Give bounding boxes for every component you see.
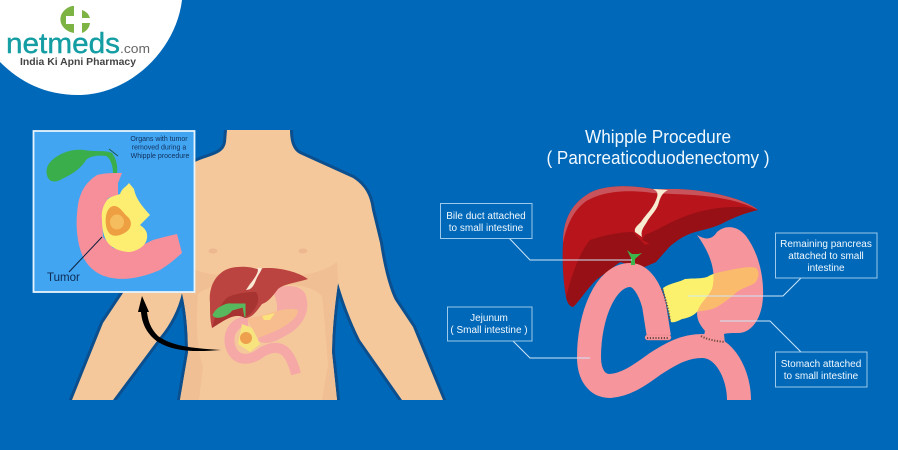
tumor pointer bbox=[69, 237, 102, 272]
small liver fissure bbox=[246, 268, 262, 290]
logo: netmeds: India Ki Apni Pharmacy bbox=[20, 56, 136, 68]
diagram: reconstructed organs bbox=[563, 186, 763, 400]
small tumor area bbox=[238, 324, 260, 352]
callout: remaining pancreas bbox=[776, 233, 877, 278]
cuff of open loop bbox=[645, 335, 671, 340]
callout: jejunum bbox=[448, 307, 532, 341]
callout lines bbox=[509, 238, 801, 358]
gallbladder removed bbox=[47, 150, 117, 182]
callout: remaining pancreas: intestine bbox=[807, 263, 845, 274]
abdomen shading bbox=[180, 262, 338, 400]
callout: stomach: Stomach attached bbox=[781, 359, 861, 370]
liver bbox=[563, 186, 758, 307]
bile duct bbox=[627, 250, 642, 265]
nipples bbox=[208, 248, 308, 254]
title: ( Pancreaticoduodenectomy ) bbox=[546, 148, 770, 168]
small liver bbox=[210, 267, 308, 328]
callout: stomach: to small intestine bbox=[784, 371, 859, 382]
small pancreas bbox=[246, 309, 298, 338]
callout: remaining pancreas: attached to small bbox=[788, 251, 864, 262]
pancreas overlap on stomach bbox=[698, 267, 758, 312]
callout: bile duct bbox=[440, 204, 532, 238]
small liver shade bbox=[212, 292, 258, 328]
sutures bbox=[647, 289, 725, 342]
callout: jejunum: Jejunum bbox=[470, 313, 508, 324]
callout: bile duct: Bile duct attached bbox=[446, 211, 526, 222]
title bbox=[546, 127, 770, 168]
title: Whipple Procedure bbox=[585, 127, 731, 147]
logo: netmeds bbox=[0, 0, 182, 95]
tumor bbox=[106, 206, 131, 236]
callout: stomach bbox=[776, 352, 867, 387]
small stomach bbox=[258, 286, 307, 343]
logo wordmark: netmeds bbox=[6, 28, 120, 60]
yellow pancreas section bbox=[102, 183, 150, 252]
callout: remaining pancreas: Remaining pancreas bbox=[780, 239, 872, 250]
inset label: Whipple procedure bbox=[131, 153, 189, 160]
logo: netmeds: .com bbox=[120, 41, 150, 56]
inset label: removed during a bbox=[132, 144, 186, 152]
icon: green cross bbox=[60, 6, 90, 33]
liver shaded lobe bbox=[566, 232, 672, 307]
stomach bbox=[697, 227, 763, 344]
inset label: Organs with tumor bbox=[130, 136, 188, 143]
pancreas bbox=[663, 267, 759, 322]
small duodenum and intestine bbox=[230, 321, 296, 374]
tumor label: Tumor bbox=[47, 272, 80, 284]
human torso bbox=[72, 130, 443, 400]
jejunum small intestine bbox=[589, 275, 739, 400]
small organs in the body bbox=[210, 267, 308, 374]
curved arrow to inset bbox=[138, 296, 221, 351]
liver fissure bbox=[635, 189, 668, 237]
liver highlight bbox=[563, 186, 758, 243]
callout: bile duct: to small intestine bbox=[449, 223, 524, 234]
inset panel: organs with tumor bbox=[34, 131, 194, 292]
duodenum removed bbox=[77, 173, 182, 279]
callout: jejunum: ( Small intestine ) bbox=[450, 325, 528, 336]
small gallbladder bbox=[213, 304, 245, 317]
